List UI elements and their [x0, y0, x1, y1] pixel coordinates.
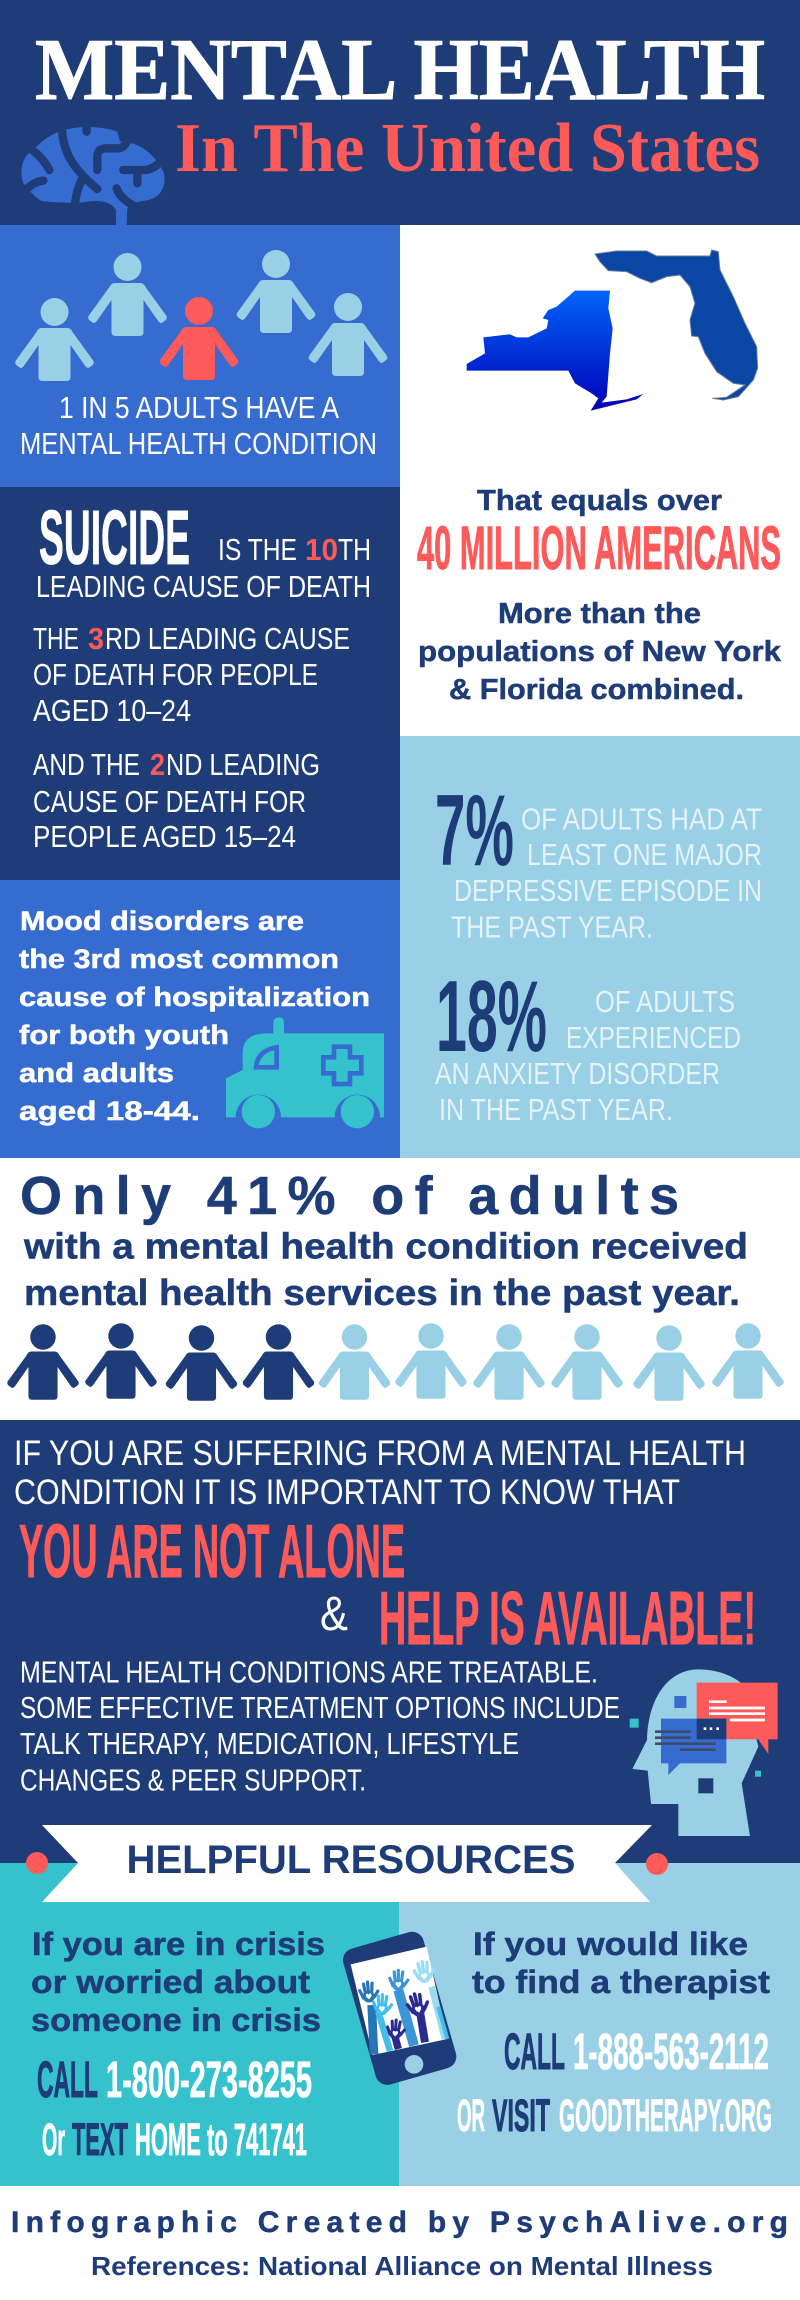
stat: 7%: 7% [435, 775, 514, 887]
text: treatment options: CHANGES & PEER SUPPORT. [20, 1762, 366, 1798]
text: call crisis line: 1-800-273-8255 [106, 2051, 312, 2108]
text: treatment options: SOME EFFECTIVE TREATMENT OPTIONS INCLUDE [20, 1690, 620, 1725]
text: if you are in crisis: someone in crisis [31, 2002, 321, 2038]
text: find a therapist: to find a therapist [472, 1964, 770, 2000]
text: text home: TEXT [72, 2114, 128, 2165]
text: received services: with a mental health condition received [23, 1226, 748, 1266]
text: 2nd leading cause: CAUSE OF DEATH FOR [33, 784, 306, 819]
text: if you are suffering [14, 1434, 746, 1512]
icon: left banner dot [26, 1852, 48, 1874]
text: 10th leading cause: 10 [305, 532, 338, 567]
text: references: References: National Alliance on Mental Illness [91, 2251, 713, 2281]
panel: suicide: SUICIDE [39, 495, 190, 581]
text: find a therapist [472, 1926, 770, 2000]
text: mood disorders [19, 906, 370, 1126]
icon: row of ten people [7, 1323, 784, 1401]
banner: helpful resources [26, 1825, 668, 1902]
text: 2nd leading cause [33, 747, 320, 854]
panel: crisis resources: HOME to 741741 [135, 2114, 307, 2165]
title: MENTAL HEALTH [35, 22, 765, 119]
text: or visit goodtherapy [457, 2090, 772, 2141]
text: call crisis line: CALL [37, 2051, 98, 2108]
text: mood disorders: cause of hospitalization [19, 982, 370, 1012]
text: 3rd leading cause [33, 621, 350, 728]
stat: 18%: 18% [436, 961, 547, 1073]
text: 2nd leading cause: 2 [150, 747, 165, 782]
panel: header [0, 0, 800, 226]
text: 10th leading cause: IS THE [218, 532, 297, 567]
panel: footer [0, 2186, 800, 2300]
text: major depressive episode: THE PAST YEAR. [451, 910, 653, 944]
text: 1 in 5 adults: 1 IN 5 ADULTS HAVE A [59, 390, 339, 425]
text: mood disorders: aged 18-44. [19, 1096, 200, 1126]
icon: New York and Florida map [467, 250, 758, 411]
text: mood disorders: the 3rd most common [19, 944, 339, 974]
text: that equals over: That equals over [477, 485, 722, 517]
panel: help is available: YOU ARE NOT ALONE [19, 1509, 405, 1593]
text: 10th leading cause: LEADING CAUSE OF DEATH [36, 569, 371, 604]
text: 3rd leading cause: RD LEADING CAUSE [105, 621, 350, 656]
icon: five people [15, 250, 387, 381]
text: anxiety disorder: EXPERIENCED [566, 1020, 741, 1055]
text: 1 in 5 adults: MENTAL HEALTH CONDITION [20, 426, 377, 461]
text: received services: mental health services in the past year. [24, 1272, 740, 1313]
text: call therapist line: CALL [504, 2023, 565, 2080]
icon: right banner dot [646, 1853, 668, 1875]
text: more than populations [418, 598, 782, 706]
panel: only 41 percent [0, 1158, 800, 1420]
icon: phone with raised hands [340, 1929, 459, 2088]
icon: brain tree [21, 125, 165, 226]
text: or visit goodtherapy: OR [457, 2090, 485, 2141]
panel: 1 in 5 adults [0, 225, 400, 487]
text: credit: Infographic Created by PsychAlive.org [11, 2206, 788, 2239]
text: text home [42, 2114, 307, 2165]
panel: 40 million americans [400, 225, 800, 736]
text: treatment options [20, 1654, 620, 1798]
text: mood disorders: for both youth [19, 1020, 229, 1050]
text: anxiety disorder [435, 984, 741, 1127]
text: or visit goodtherapy: VISIT [492, 2090, 550, 2141]
panel: suicide [0, 487, 400, 880]
icon: ambulance [226, 1017, 384, 1128]
subtitle: In The United States [175, 110, 760, 187]
text: more than populations: More than the [498, 598, 701, 630]
text: 2nd leading cause: AND THE [33, 747, 140, 782]
panel: depression and anxiety stats [400, 736, 800, 1158]
text: mood disorders: Mood disorders are [20, 906, 304, 936]
panel: crisis resources [0, 1863, 399, 2186]
text: 10th leading cause [36, 532, 371, 604]
text: mood disorders: and adults [19, 1058, 174, 1088]
text: call crisis line [37, 2051, 312, 2108]
text: 3rd leading cause: AGED 10–24 [33, 693, 191, 728]
heading: helpful resources: HELPFUL RESOURCES [126, 1838, 576, 1882]
text: 1 in 5 adults [20, 390, 377, 461]
text: more than populations: populations of New York [418, 636, 782, 668]
text: 2nd leading cause: ND LEADING [166, 747, 320, 782]
text: 3rd leading cause: THE [33, 621, 79, 656]
text: 3rd leading cause: 3 [88, 621, 104, 656]
text: call therapist line [504, 2023, 769, 2080]
text: treatment options: MENTAL HEALTH CONDITIONS ARE TREATABLE. [20, 1654, 598, 1690]
text: 3rd leading cause: OF DEATH FOR PEOPLE [33, 657, 318, 692]
text: find a therapist: If you would like [473, 1926, 748, 1962]
text: if you are in crisis: or worried about [31, 1964, 310, 2000]
text: more than populations: & Florida combined. [449, 674, 744, 706]
text: received services [23, 1226, 748, 1313]
text: major depressive episode [451, 802, 762, 944]
panel: help is available [0, 1420, 800, 1863]
text: 2nd leading cause: PEOPLE AGED 15–24 [33, 819, 296, 854]
panel: therapist resources [399, 1863, 800, 2186]
text: if you are suffering: CONDITION IT IS IMPORTANT TO KNOW THAT [14, 1473, 680, 1512]
text: if you are in crisis: If you are in crisis [32, 1926, 325, 1962]
text: anxiety disorder: IN THE PAST YEAR. [439, 1092, 673, 1127]
text: anxiety disorder: OF ADULTS [595, 984, 735, 1019]
text: 10th leading cause: TH [338, 532, 371, 567]
text: anxiety disorder: AN ANXIETY DISORDER [435, 1056, 720, 1091]
text: if you are in crisis [31, 1926, 325, 2038]
text: treatment options: TALK THERAPY, MEDICATION, LIFESTYLE [20, 1726, 519, 1761]
text: ampersand: & [320, 1588, 348, 1641]
panel: mood disorders [0, 880, 400, 1158]
heading: only 41% of adults: Only 41% of adults [20, 1166, 679, 1226]
icon: head with speech bubbles [630, 1669, 778, 1836]
text: text home: Or [42, 2114, 65, 2165]
